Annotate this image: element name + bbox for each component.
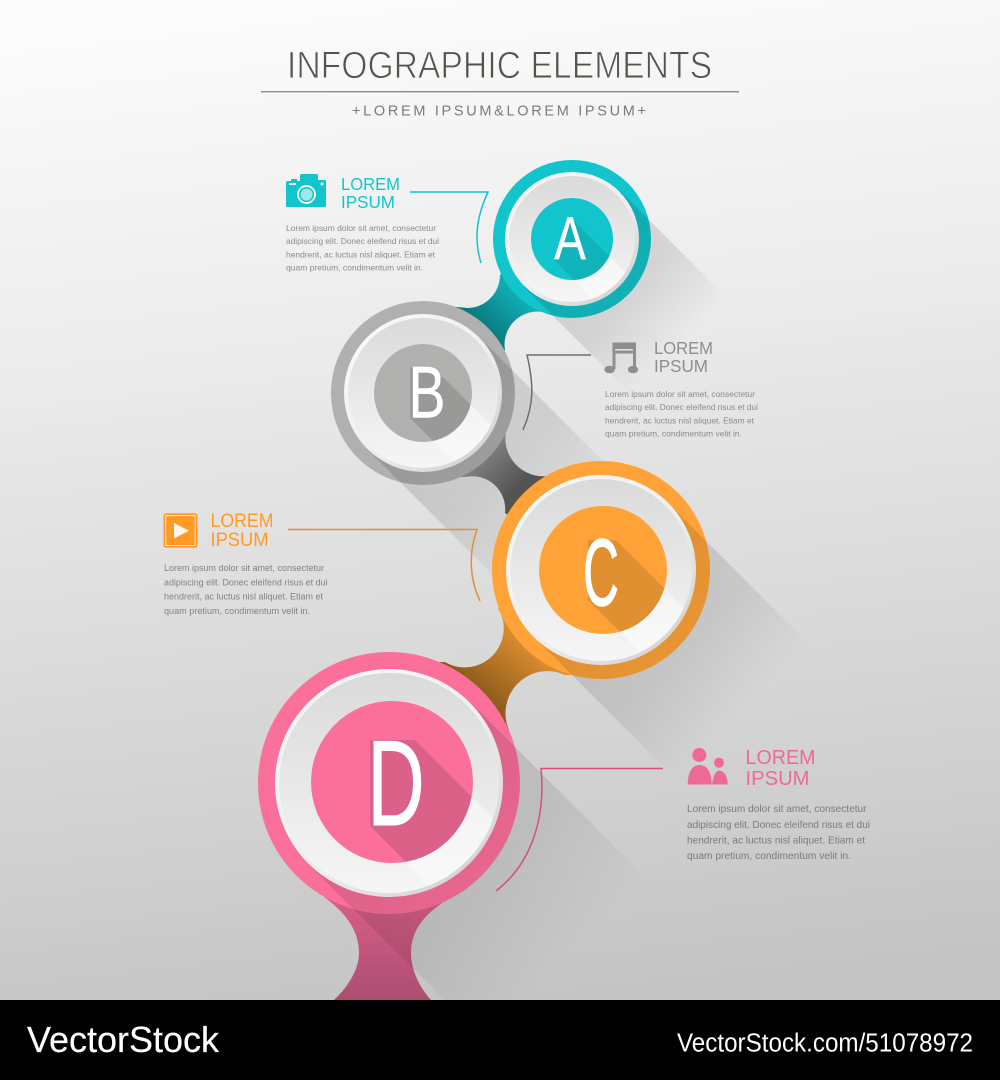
node C	[439, 461, 781, 749]
heading C: IPSUM	[210, 530, 268, 551]
node A	[454, 160, 708, 375]
ring A with connector to B	[440, 160, 651, 355]
leader line C	[288, 530, 480, 601]
ring C with connector to D	[400, 461, 710, 760]
disc B	[344, 314, 502, 472]
heading D: IPSUM	[746, 767, 810, 790]
disc D	[275, 669, 503, 897]
heading B: LOREM	[654, 338, 713, 358]
heading D	[746, 746, 816, 790]
inner circle C	[539, 506, 667, 634]
subtitle: +LOREM IPSUM&LOREM IPSUM+	[352, 104, 646, 120]
body text A: Lorem ipsum dolor sit amet, consectetur	[286, 223, 436, 233]
letter A: A	[554, 204, 586, 273]
leader line A	[410, 192, 488, 263]
leader line D	[496, 768, 663, 891]
body text A: quam pretium, condimentum velit in.	[286, 262, 423, 272]
heading B	[654, 338, 713, 376]
label block A	[286, 174, 439, 272]
inner circle D	[311, 701, 473, 863]
node B	[331, 301, 602, 573]
body text B: adipiscing elit. Donec eleifend risus et dui	[605, 402, 758, 412]
letter D: D	[367, 715, 425, 851]
title: INFOGRAPHIC ELEMENTS	[287, 44, 712, 86]
body text D: quam pretium, condimentum velit in.	[687, 851, 851, 862]
body text B: Lorem ipsum dolor sit amet, consectetur	[605, 389, 755, 399]
long shadow A	[524, 191, 726, 393]
node D	[258, 652, 605, 1000]
body text C: quam pretium, condimentum velit in.	[164, 606, 310, 616]
heading A	[341, 174, 400, 212]
body text A	[286, 223, 439, 272]
body text D	[687, 804, 870, 862]
label block B	[604, 338, 758, 438]
body text D: hendrerit, ac luctus nisl aliquet. Etiam et	[687, 836, 865, 846]
heading D: LOREM	[746, 746, 816, 769]
ring D with stem	[258, 652, 520, 1000]
heading A: IPSUM	[341, 192, 395, 212]
disc A	[505, 172, 639, 306]
heading C	[210, 511, 274, 551]
inner circle B	[374, 344, 472, 442]
heading C: LOREM	[210, 511, 274, 532]
leader line B	[523, 355, 591, 430]
long shadow D	[308, 702, 647, 1000]
title rule	[261, 91, 739, 92]
heading B: IPSUM	[654, 356, 708, 376]
body text A: hendrerit, ac luctus nisl aliquet. Etiam et	[286, 250, 436, 260]
body text D: Lorem ipsum dolor sit amet, consectetur	[687, 804, 867, 815]
inner circle A	[531, 198, 613, 280]
body text C	[164, 563, 328, 616]
body text B: quam pretium, condimentum velit in.	[605, 428, 742, 438]
disc C	[506, 475, 696, 665]
footer bar	[0, 1000, 1000, 1080]
body text D: adipiscing elit. Donec eleifend risus et dui	[687, 820, 870, 831]
icon: camera	[286, 174, 326, 207]
long shadow B	[367, 337, 639, 609]
footer url: VectorStock.com/51078972	[677, 1030, 973, 1058]
body text B: hendrerit, ac luctus nisl aliquet. Etiam et	[605, 416, 755, 426]
label block C	[164, 511, 328, 616]
body text C: adipiscing elit. Donec eleifend risus et dui	[164, 578, 328, 588]
body text A: adipiscing elit. Donec eleifend risus et dui	[286, 236, 439, 246]
ring B with connector to C	[331, 301, 570, 540]
label block D	[687, 746, 870, 862]
body text B	[605, 389, 758, 438]
icon: people	[688, 748, 728, 784]
body text C: Lorem ipsum dolor sit amet, consectetur	[164, 563, 324, 573]
icon: music note	[604, 342, 638, 373]
body text C: hendrerit, ac luctus nisl aliquet. Etiam et	[164, 592, 323, 602]
long shadow C	[534, 503, 809, 778]
letter C: C	[583, 520, 619, 626]
icon: play button	[164, 513, 198, 548]
heading A: LOREM	[341, 174, 400, 194]
footer logo: VectorStock	[27, 1019, 220, 1060]
letter B: B	[408, 351, 446, 433]
